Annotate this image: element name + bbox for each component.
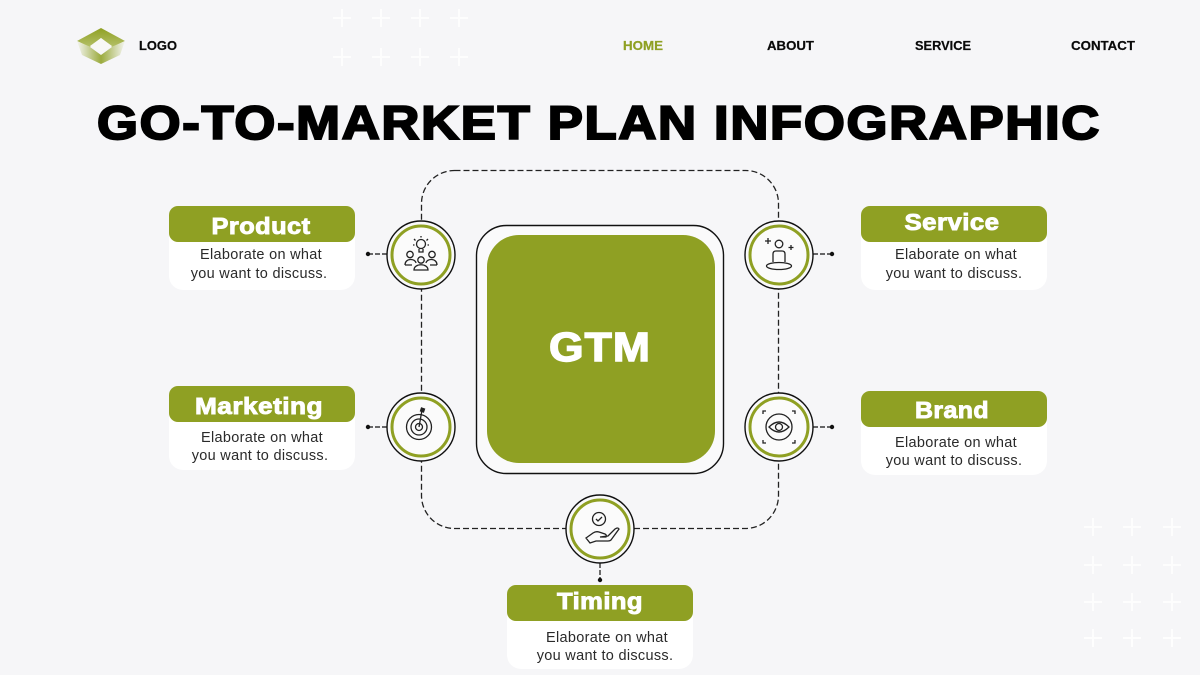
body text: marketing: you want to discuss. (192, 448, 328, 464)
nav: about: ABOUT (767, 39, 814, 53)
card: marketing (169, 386, 355, 470)
nav: contact: CONTACT (1071, 39, 1135, 53)
logo text: LOGO (139, 39, 177, 53)
navigation (623, 39, 1135, 53)
card: product (169, 206, 355, 290)
card: brand (861, 391, 1047, 475)
heading: marketing: Marketing (195, 393, 323, 419)
decorative plus grid: top (333, 9, 468, 66)
node: service icon (745, 221, 813, 289)
center panel: GTM (476, 226, 724, 474)
body text: service: you want to discuss. (886, 266, 1022, 282)
card: service (861, 206, 1047, 290)
decorative plus grid: bottom right (1084, 518, 1181, 647)
connectors (368, 254, 832, 580)
body text: timing: you want to discuss. (537, 648, 673, 664)
node: brand icon (745, 393, 813, 461)
body text: timing: Elaborate on what (546, 630, 668, 646)
heading: service: Service (904, 209, 1000, 235)
nav: home: HOME (623, 39, 663, 53)
body text: marketing: Elaborate on what (201, 430, 323, 446)
body text: product: Elaborate on what (200, 247, 322, 263)
body text: brand: you want to discuss. (886, 453, 1022, 469)
body text: product: you want to discuss. (191, 266, 327, 282)
heading: brand: Brand (915, 397, 989, 423)
dashed frame (422, 170, 778, 528)
title: GO-TO-MARKET PLAN INFOGRAPHIC (97, 96, 1101, 149)
body text: service: Elaborate on what (895, 247, 1017, 263)
card: timing (507, 585, 693, 669)
node: marketing icon (387, 393, 455, 461)
node: product icon (387, 221, 455, 289)
logo icon (77, 28, 125, 64)
nav: service: SERVICE (915, 39, 971, 53)
heading: product: Product (212, 213, 310, 239)
connector dots (366, 252, 834, 582)
body text: brand: Elaborate on what (895, 435, 1017, 451)
heading: timing: Timing (557, 588, 643, 614)
center label: GTM (549, 324, 651, 370)
node: timing icon (566, 495, 634, 563)
